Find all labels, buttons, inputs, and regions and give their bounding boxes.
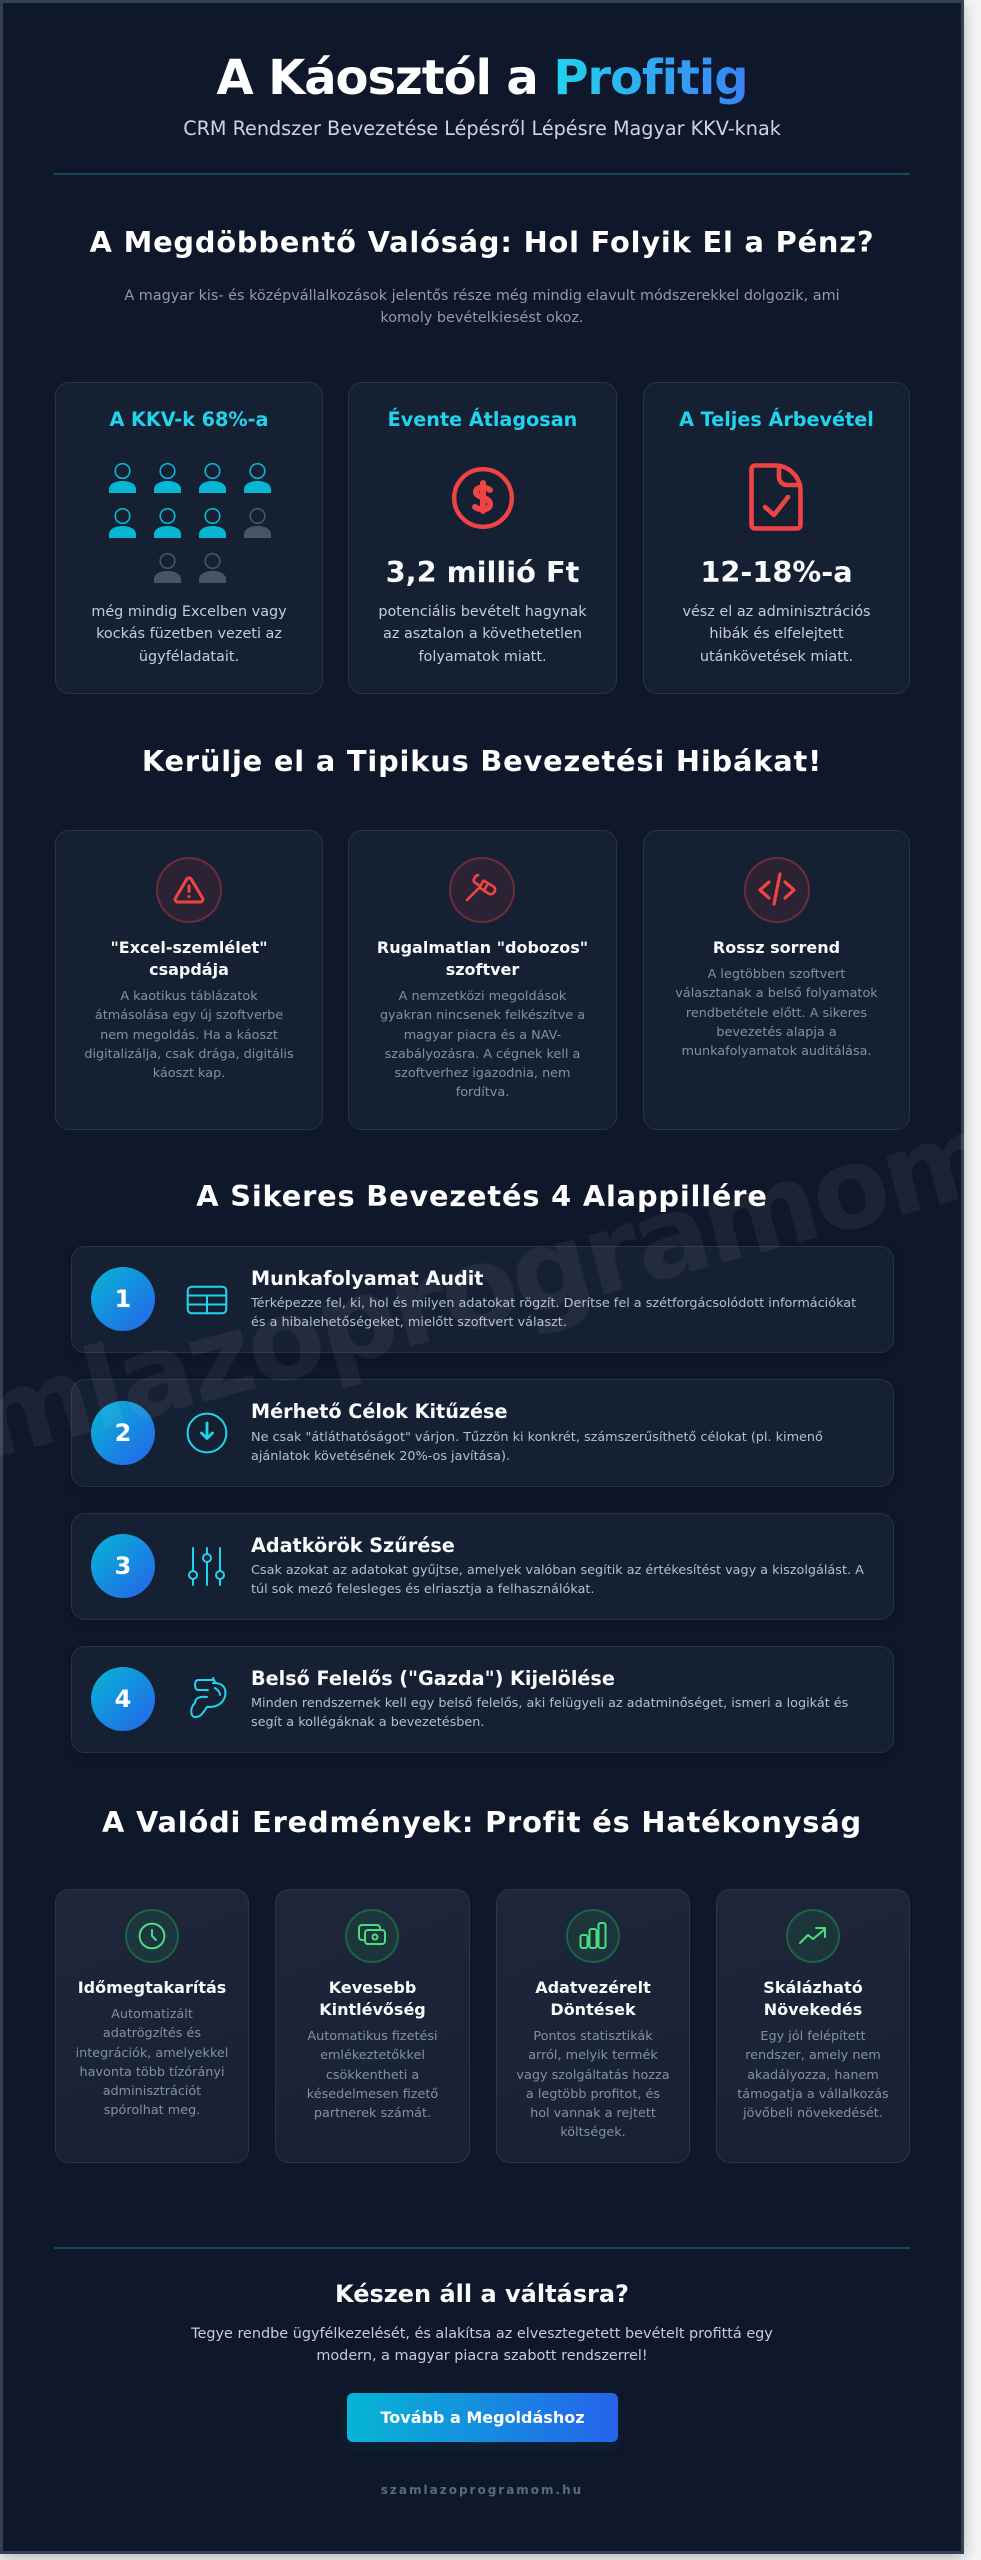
panel: data driven — [496, 1889, 690, 2163]
card text: munkafolyamatok auditálása. — [681, 1044, 872, 1059]
card text: akadályozza, hanem — [747, 2068, 879, 2083]
card text — [307, 2029, 438, 2121]
panel: step 2 — [71, 1379, 894, 1487]
card text: támogatja a vállalkozás — [737, 2087, 889, 2102]
card text: gyakran nincsenek felkészítve a — [380, 1008, 585, 1023]
card title: Növekedés — [764, 2000, 862, 2019]
call to action text: modern, a magyar piacra szabott rendszerrel! — [316, 2348, 648, 2364]
icon: banknotes — [345, 1909, 399, 1963]
card text: arról, melyik termék — [528, 2048, 658, 2063]
call to action text: Tegye rendbe ügyfélkezelését, és alakítsa az elvesztegetett bevételt profittá egy — [191, 2326, 773, 2342]
number badge: 3 — [115, 1552, 131, 1580]
panel: total revenue — [643, 382, 910, 694]
icon: dollar coin — [452, 467, 514, 529]
step text — [251, 1563, 864, 1597]
call to action heading: Készen áll a váltásra? — [335, 2280, 629, 2308]
title: A Káosztól a Profitig — [217, 50, 747, 106]
intro text: komoly bevételkiesést okoz. — [380, 310, 584, 326]
number badge — [91, 1667, 155, 1731]
card text: vagy szolgáltatás hozza — [516, 2068, 670, 2083]
step text — [250, 1296, 856, 1330]
card text: jövőbeli növekedését. — [743, 2106, 883, 2121]
card title: Évente Átlagosan — [388, 408, 577, 431]
card text: magyar piacra és a NAV- — [404, 1028, 561, 1043]
card text — [380, 989, 585, 1100]
card title: Adatvezérelt — [535, 1978, 651, 1997]
step title: Adatkörök Szűrése — [251, 1534, 455, 1557]
number badge: 1 — [115, 1285, 131, 1313]
panel: step 1 — [71, 1246, 894, 1353]
panel: excel trap — [55, 830, 323, 1130]
card title: Kevesebb — [329, 1978, 416, 1997]
number badge: 4 — [115, 1685, 131, 1713]
step text: Minden rendszernek kell egy belső felelős, aki felügyeli az adatminőséget, ismeri a logikát és — [251, 1696, 848, 1711]
card title: "Excel-szemlélet" — [110, 938, 268, 957]
icon: table — [186, 1286, 228, 1314]
card text: választanak a belső folyamatok — [675, 986, 878, 1001]
card title: Rugalmatlan "dobozos" — [377, 938, 588, 957]
card text — [378, 604, 587, 665]
panel: time saving — [55, 1889, 249, 2163]
card text: nem megoldás. Ha a káoszt — [100, 1028, 278, 1043]
card text: kockás füzetben vezeti az — [96, 626, 282, 642]
number badge: 2 — [115, 1419, 131, 1447]
card text: rendszer, amely nem — [745, 2048, 881, 2063]
card text: Pontos statisztikák — [533, 2029, 653, 2044]
footer domain: szamlazoprogramom.hu — [381, 2483, 583, 2497]
card text: emlékeztetőkkel — [320, 2048, 425, 2063]
step text — [251, 1430, 823, 1464]
step text — [251, 1696, 848, 1730]
card title — [110, 938, 268, 979]
card text: késedelmesen fizető — [307, 2087, 438, 2102]
card text: átmásolása egy új szoftverbe — [95, 1008, 283, 1023]
step text: túl sok mező felesleges és elriasztja a felhasználókat. — [251, 1582, 595, 1597]
card title: csapdája — [149, 960, 229, 979]
card title: Döntések — [550, 2000, 636, 2019]
icon: document check — [749, 463, 803, 531]
card text: Automatizált — [111, 2007, 193, 2022]
heading: mistakes: Kerülje el a Tipikus Bevezetési Hibákat! — [142, 744, 822, 778]
step text: Ne csak "átláthatóságot" várjon. Tűzzön ki konkrét, számszerűsíthető célokat (pl. kimenő — [251, 1430, 823, 1445]
icon grid: people — [109, 462, 271, 583]
panel: step 4 — [71, 1646, 894, 1753]
intro text — [124, 288, 840, 326]
card title: szoftver — [446, 960, 519, 979]
button: Tovább a Megoldáshoz — [380, 2408, 585, 2427]
intro text: A magyar kis- és középvállalkozások jelentős része még mindig elavult módszerekkel dolgozik, ami — [124, 288, 840, 304]
panel: step 3 — [71, 1513, 894, 1620]
number badge — [91, 1267, 155, 1331]
big number: 12-18%-a — [700, 555, 853, 589]
step text: segít a kollégáknak a bevezetésben. — [251, 1715, 484, 1730]
step title: Munkafolyamat Audit — [251, 1267, 483, 1290]
card text: szabályozásra. A cégnek kell a — [385, 1047, 580, 1062]
card text: digitalizálja, csak drága, digitális — [84, 1047, 294, 1062]
card title: A KKV-k 68%-a — [110, 408, 268, 431]
card text: potenciális bevételt hagynak — [378, 604, 587, 620]
step title: Mérhető Célok Kitűzése — [251, 1400, 507, 1423]
big number: 3,2 millió Ft — [386, 555, 579, 589]
panel: yearly average — [348, 382, 617, 694]
card text: integrációk, amelyekkel — [76, 2046, 228, 2061]
card text: Egy jól felépített — [760, 2029, 866, 2044]
icon: hammer — [449, 857, 515, 923]
heading: reality: A Megdöbbentő Valóság: Hol Folyik El a Pénz? — [90, 225, 874, 259]
card text: rendbetétele előtt. A sikeres — [686, 1006, 867, 1021]
card text: káoszt kap. — [153, 1066, 225, 1081]
step text: Csak azokat az adatokat gyűjtse, amelyek valóban segítik az értékesítést vagy a kiszolgálást. A — [251, 1563, 864, 1578]
card text: adminisztrációt — [103, 2084, 201, 2099]
step text: Térképezze fel, ki, hol és milyen adatokat rögzít. Derítse fel a szétforgácsolódott információkat — [251, 1296, 856, 1311]
card text: A nemzetközi megoldások — [399, 989, 566, 1004]
card title — [377, 938, 588, 979]
card text: ügyféladatait. — [139, 649, 239, 665]
card title — [535, 1978, 651, 2019]
panel: fewer receivables — [275, 1889, 470, 2163]
icon: puzzle — [190, 1677, 226, 1718]
icon: warning — [156, 857, 222, 923]
card title: Rossz sorrend — [713, 938, 840, 957]
panel: scalable growth — [716, 1889, 910, 2163]
card text — [91, 604, 287, 665]
card text: hibák és elfelejtett — [709, 626, 844, 642]
card title: A Teljes Árbevétel — [679, 408, 874, 431]
icon: clock arrow — [186, 1412, 228, 1454]
card text: költségek. — [560, 2125, 626, 2140]
number badge — [91, 1401, 155, 1465]
icon: code — [744, 857, 810, 923]
card title: Kintlévőség — [319, 2000, 426, 2019]
card text: utánkövetések miatt. — [700, 649, 853, 665]
card text: a legtöbb profitot, és — [526, 2087, 660, 2102]
card text: csökkentheti a — [326, 2068, 419, 2083]
card text — [76, 2007, 228, 2118]
step text: és a hibalehetőségeket, mielőtt szoftvert választ. — [251, 1315, 567, 1330]
card text: Automatikus fizetési — [307, 2029, 438, 2044]
card text: havonta több tízórányi — [79, 2065, 224, 2080]
call to action text — [191, 2326, 773, 2364]
step title: Belső Felelős ("Gazda") Kijelölése — [251, 1667, 615, 1690]
card title: Időmegtakarítás — [78, 1978, 226, 1997]
icon: sliders — [188, 1547, 225, 1586]
number badge — [91, 1534, 155, 1598]
card title — [319, 1978, 426, 2019]
panel: rigid software — [348, 830, 617, 1130]
card text — [516, 2029, 670, 2140]
card text: bevezetés alapja a — [716, 1025, 837, 1040]
button — [347, 2393, 618, 2442]
card title — [763, 1978, 863, 2019]
card text: A legtöbben szoftvert — [708, 967, 845, 982]
card text: fordítva. — [456, 1085, 509, 1100]
card text: spórolhat meg. — [104, 2103, 200, 2118]
card text — [682, 604, 871, 665]
card text: A kaotikus táblázatok — [120, 989, 258, 1004]
card text — [84, 989, 294, 1081]
card text: hol vannak a rejtett — [530, 2106, 656, 2121]
card text — [675, 967, 878, 1059]
card text: még mindig Excelben vagy — [91, 604, 287, 620]
card text: az asztalon a követhetetlen — [383, 626, 582, 642]
subtitle: CRM Rendszer Bevezetése Lépésről Lépésre Magyar KKV-knak — [183, 117, 781, 140]
panel: KKV 68% — [55, 382, 323, 694]
icon: bars — [566, 1909, 620, 1963]
card text: partnerek számát. — [314, 2106, 431, 2121]
card title: Skálázható — [763, 1978, 863, 1997]
card text: adatrögzítés és — [103, 2026, 201, 2041]
panel: wrong order — [643, 830, 910, 1130]
card text: folyamatok miatt. — [418, 649, 547, 665]
step text: ajánlatok követésének 20%-os javítása). — [251, 1449, 510, 1464]
heading: results: A Valódi Eredmények: Profit és Hatékonyság — [102, 1805, 862, 1839]
card text: szoftverhez igazodnia, nem — [394, 1066, 571, 1081]
card text: vész el az adminisztrációs — [682, 604, 871, 620]
icon: trend up — [786, 1909, 840, 1963]
card text — [737, 2029, 889, 2121]
icon: clock — [125, 1909, 179, 1963]
heading: pillars: A Sikeres Bevezetés 4 Alappillére — [196, 1179, 768, 1213]
